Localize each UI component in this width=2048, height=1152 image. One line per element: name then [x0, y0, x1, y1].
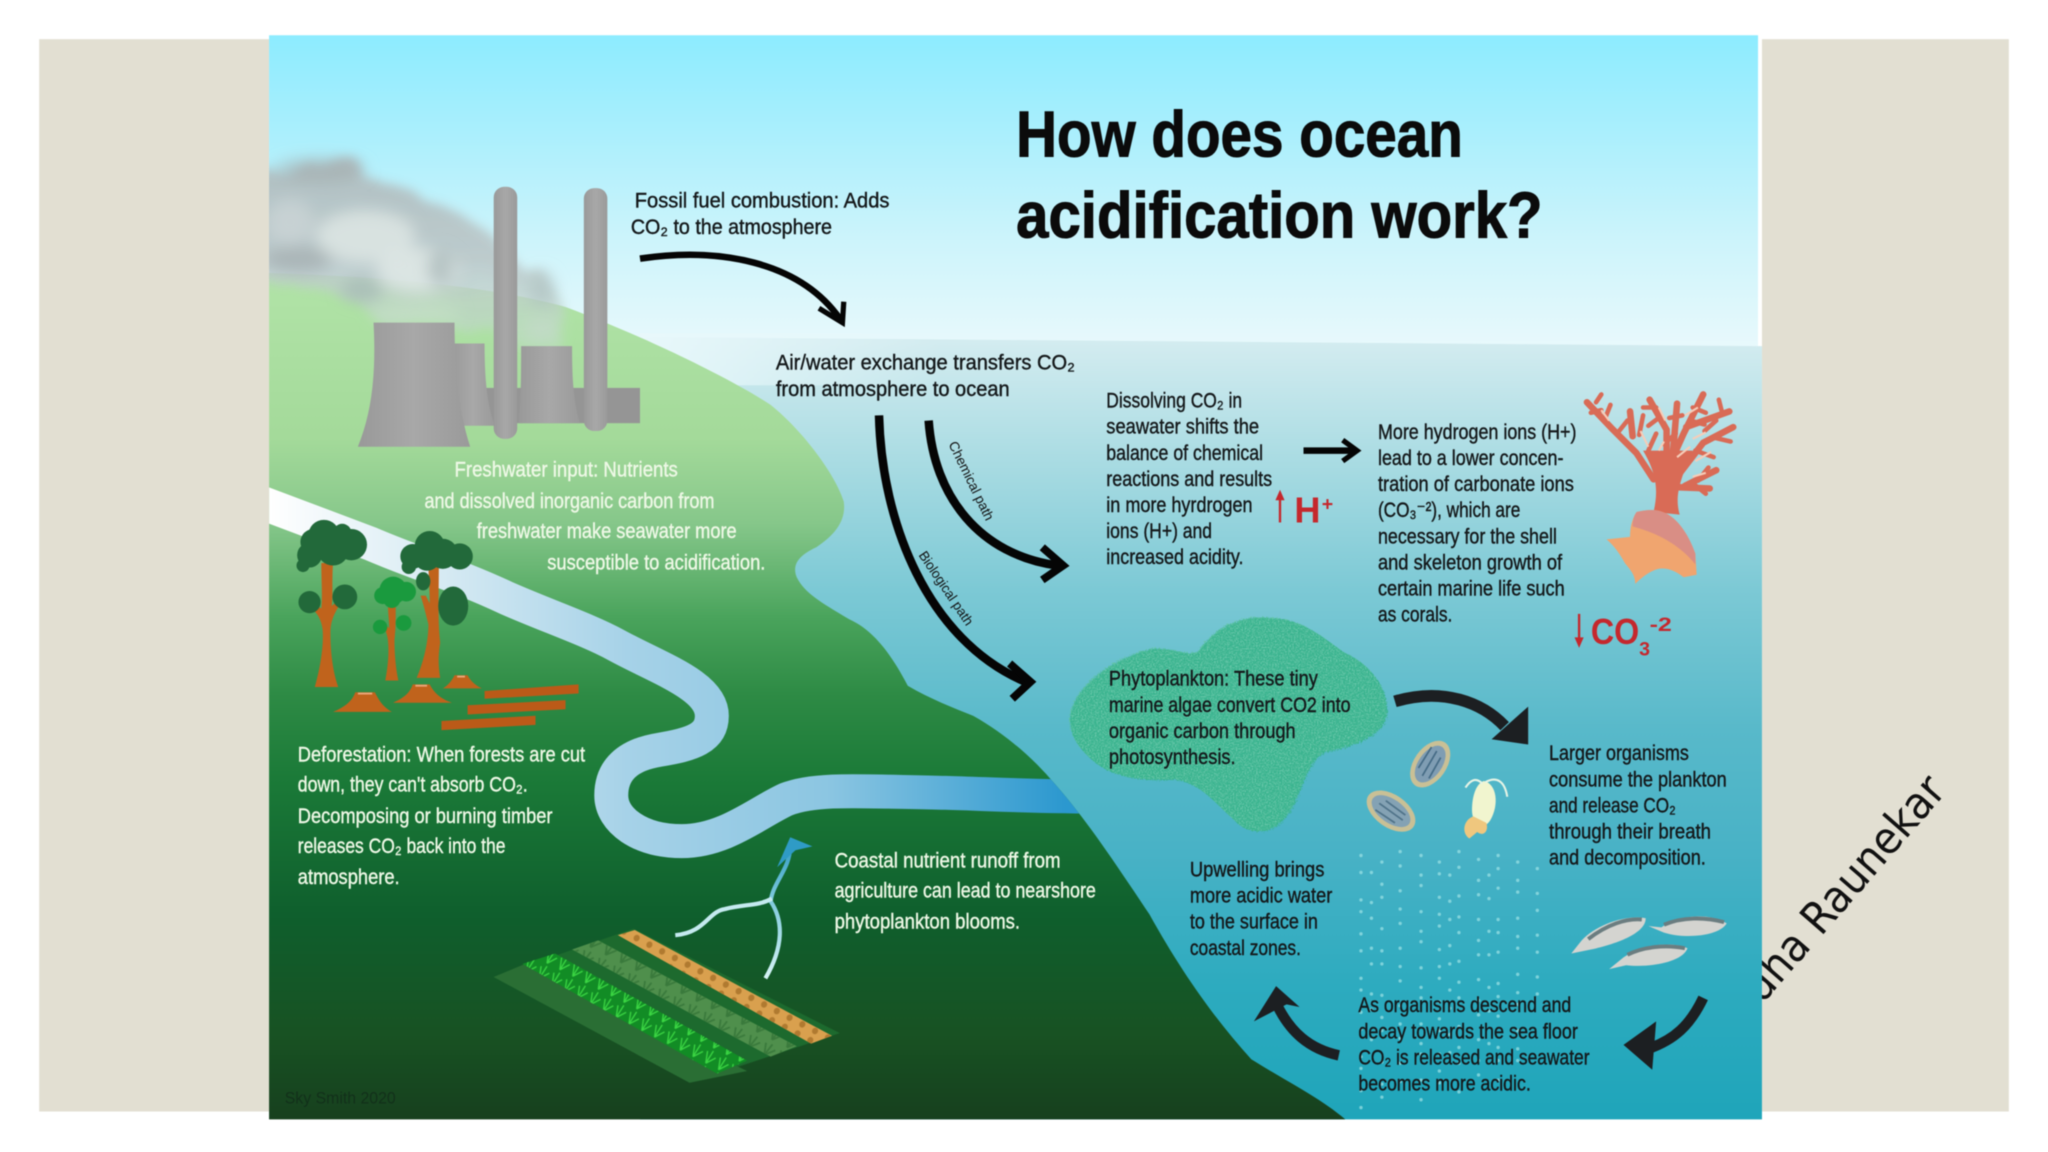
arrow: decay to upwelling — [1254, 986, 1339, 1055]
plankton bloom blob — [1070, 617, 1387, 832]
text: decay to sea floor — [1358, 994, 1590, 1096]
land hill — [269, 273, 1345, 1119]
text: freshwater input: and dissolved inorganic carbon from — [424, 490, 714, 513]
text: deforestation: Deforestation: When forests are cut — [298, 743, 585, 766]
power plant — [358, 187, 640, 447]
H+ increase indicator: + — [1322, 494, 1333, 516]
text: coastal nutrient runoff: agriculture can lead to nearshore — [835, 879, 1096, 902]
text: dissolving CO2 — [1106, 390, 1272, 569]
base block — [486, 388, 640, 423]
label: biological path: Biological path — [916, 548, 976, 628]
arrow: fossil fuel to ocean — [640, 255, 844, 323]
credit: Sky Smith 2020 — [285, 1089, 396, 1108]
CO3 decrease indicator: 3 — [1639, 639, 1650, 661]
trees and deforestation — [296, 520, 579, 730]
text: phytoplankton — [1109, 668, 1351, 769]
CO3 decrease indicator — [1575, 611, 1672, 661]
text: freshwater input: susceptible to acidification. — [547, 551, 765, 574]
text: phytoplankton: organic carbon through — [1109, 720, 1296, 743]
horizon haze — [640, 333, 940, 385]
title — [1016, 98, 1543, 252]
ocean background — [640, 337, 1762, 1119]
label: chemical path: Chemical path — [946, 439, 997, 523]
text: upwelling: more acidic water — [1190, 885, 1332, 908]
lower strip — [494, 964, 747, 1083]
soil strip — [618, 930, 832, 1044]
text: hydrogen ions: (CO₃⁻²), which are — [1378, 499, 1520, 522]
text: hydrogen ions: tration of carbonate ions — [1378, 473, 1574, 496]
H+ increase indicator: H — [1294, 489, 1320, 530]
text: larger organisms: and release CO₂ — [1549, 794, 1676, 817]
fish 3 — [1609, 945, 1688, 969]
text: hydrogen ions — [1378, 421, 1576, 627]
author watermark: Radha Raunekar — [1698, 765, 1956, 1051]
title: acidification work? — [1016, 179, 1543, 252]
text: coastal nutrient runoff — [835, 849, 1096, 934]
text: deforestation — [298, 743, 585, 889]
sinking particles — [1361, 852, 1537, 1110]
text: freshwater input: Freshwater input: Nutrients — [455, 459, 678, 482]
text: air water exchange: Air/water exchange transfers CO₂ — [776, 352, 1075, 375]
chimney right — [584, 188, 607, 431]
H+ increase indicator — [1275, 489, 1333, 530]
text: upwelling: to the surface in — [1190, 911, 1318, 934]
text: phytoplankton: Phytoplankton: These tiny — [1109, 668, 1318, 691]
arrow: fish to decay — [1624, 998, 1703, 1070]
left beige panel — [39, 39, 269, 1112]
text: dissolving CO2: reactions and results — [1106, 468, 1272, 491]
text: larger organisms — [1549, 742, 1727, 870]
text: hydrogen ions: More hydrogen ions (H+) — [1378, 421, 1576, 444]
bright crops — [522, 953, 747, 1074]
text: hydrogen ions: certain marine life such — [1378, 578, 1565, 601]
seashell — [1607, 510, 1697, 584]
stump highlights — [358, 677, 465, 694]
sky background — [269, 35, 1758, 346]
text: deforestation: atmosphere. — [298, 866, 400, 889]
text: air water exchange: from atmosphere to ocean — [776, 378, 1010, 401]
text: phytoplankton: marine algae convert CO2 into — [1109, 694, 1351, 717]
fish school — [1571, 916, 1727, 969]
arrow: to hydrogen ions — [1304, 440, 1357, 461]
timber logs — [441, 684, 579, 730]
text: freshwater input — [424, 459, 765, 574]
text: upwelling — [1190, 858, 1332, 960]
arrow: chemical path — [929, 421, 1063, 580]
tree 3 — [400, 531, 473, 678]
text: decay to sea floor: decay towards the sea floor — [1358, 1020, 1578, 1043]
text: hydrogen ions: and skeleton growth of — [1378, 551, 1562, 574]
text: deforestation: down, they can't absorb CO₂. — [298, 774, 528, 797]
tree 1 — [296, 520, 367, 687]
cooling tower right — [519, 346, 580, 423]
text: upwelling: Upwelling brings — [1190, 858, 1324, 881]
text: upwelling: coastal zones. — [1190, 937, 1301, 960]
text: air water exchange — [776, 352, 1075, 401]
farm field — [494, 929, 840, 1083]
text: decay to sea floor: CO₂ is released and seawater — [1358, 1046, 1590, 1069]
CO3 decrease indicator: -2 — [1650, 614, 1672, 636]
copepod — [1464, 780, 1507, 839]
chimney left — [494, 187, 517, 439]
title: How does ocean — [1016, 98, 1463, 171]
fish 1 — [1571, 917, 1646, 953]
text: hydrogen ions: necessary for the shell — [1378, 525, 1557, 548]
text: larger organisms: through their breath — [1549, 821, 1711, 844]
text: fossil fuel combustion: CO₂ to the atmosphere — [631, 216, 832, 239]
CO3 decrease indicator: CO — [1591, 611, 1639, 652]
fish 2 — [1648, 916, 1727, 936]
cooling tower large — [358, 323, 470, 447]
text: dissolving CO2: seawater shifts the — [1106, 416, 1259, 439]
text: dissolving CO2: in more hyrdrogen — [1106, 494, 1253, 517]
arrow: biological path — [879, 415, 1031, 699]
runoff arrow — [675, 837, 812, 978]
text: phytoplankton: photosynthesis. — [1109, 746, 1236, 769]
smoke plume — [242, 154, 562, 349]
coral — [1587, 394, 1733, 515]
text: hydrogen ions: lead to a lower concen- — [1378, 447, 1563, 470]
text: decay to sea floor: becomes more acidic. — [1358, 1073, 1531, 1096]
text: coastal nutrient runoff: phytoplankton blooms. — [835, 911, 1020, 934]
text: hydrogen ions: as corals. — [1378, 604, 1452, 627]
cooling tower small left — [451, 344, 495, 426]
text: deforestation: Decomposing or burning timber — [298, 805, 553, 828]
seashell upper whorl — [1633, 510, 1695, 564]
text: fossil fuel combustion: Fossil fuel combustion: Adds — [635, 190, 889, 213]
text: dissolving CO2: Dissolving CO₂ in — [1106, 390, 1242, 413]
tree stumps — [333, 675, 482, 712]
text: dissolving CO2: ions (H+) and — [1106, 520, 1212, 543]
tree 2 — [373, 577, 416, 680]
text: larger organisms: consume the plankton — [1549, 768, 1727, 791]
text: fossil fuel combustion — [631, 190, 889, 239]
text: dissolving CO2: balance of chemical — [1106, 442, 1263, 465]
arrow: plankton to larger organisms — [1395, 696, 1528, 744]
right beige panel — [1762, 39, 2009, 1112]
text: deforestation: releases CO₂ back into the — [298, 835, 505, 858]
coral highlights — [1601, 408, 1711, 477]
diatoms — [1359, 733, 1459, 840]
text: larger organisms: Larger organisms — [1549, 742, 1689, 765]
text: larger organisms: and decomposition. — [1549, 847, 1706, 870]
crop strip — [572, 940, 797, 1057]
text: freshwater input: freshwater make seawater more — [477, 520, 737, 543]
river — [248, 498, 1110, 841]
text: decay to sea floor: As organisms descend and — [1358, 994, 1571, 1017]
text: dissolving CO2: increased acidity. — [1106, 546, 1243, 569]
text: coastal nutrient runoff: Coastal nutrient runoff from — [835, 849, 1061, 872]
